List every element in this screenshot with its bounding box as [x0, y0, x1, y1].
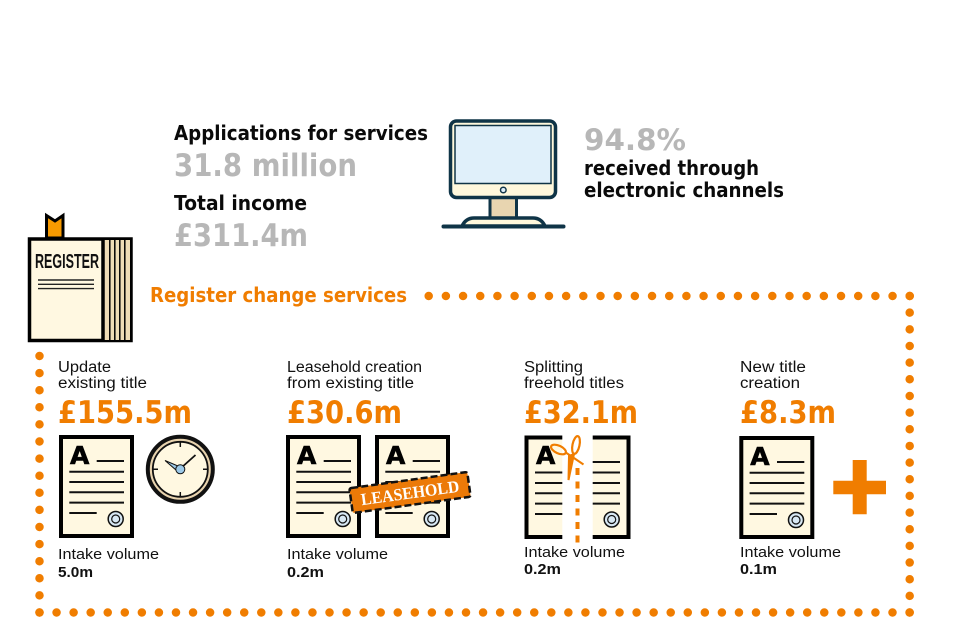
icon: document: [741, 438, 812, 537]
column: splitting freehold titles: 0.2m: [524, 561, 561, 578]
applications label: Applications for services: [174, 121, 428, 145]
intake: Intake volume: [740, 544, 841, 561]
label: Leasehold creation: [287, 359, 422, 376]
intake: Intake volume: [287, 546, 388, 563]
icon: register book: REGISTER: [35, 250, 99, 273]
income value: £311.4m: [174, 218, 308, 254]
electronic channels statistic: [584, 123, 784, 202]
column: leasehold creation: [287, 359, 471, 581]
value: £32.1m: [524, 395, 638, 431]
icon: document: [61, 437, 132, 536]
icon: scissors: [550, 435, 584, 545]
column: update existing title: [58, 359, 213, 581]
icon: document split: [526, 430, 628, 545]
column: update existing title: existing title: [58, 375, 147, 392]
column: new title creation: creation: [740, 375, 800, 392]
column: new title creation: [740, 359, 886, 578]
label: Update: [58, 359, 111, 376]
icon: clock: [148, 437, 213, 502]
icon: plus: [833, 460, 886, 514]
icon: document left: [288, 437, 359, 536]
column: leasehold creation: 0.2m: [287, 564, 324, 581]
intake: Intake volume: [58, 546, 159, 563]
label: Splitting: [524, 359, 583, 376]
icon: register book: [30, 216, 131, 341]
section heading: Register change services: [150, 283, 407, 307]
intake: Intake volume: [524, 544, 625, 561]
percentage caption: received through: [584, 156, 759, 180]
icon: document: A: [70, 441, 90, 470]
stamp: leasehold: LEASEHOLD: [360, 477, 460, 509]
column: splitting freehold titles: freehold titles: [524, 375, 624, 392]
label: New title: [740, 359, 806, 376]
value: £8.3m: [740, 395, 836, 431]
icon: document split: A: [536, 441, 556, 470]
icon: computer monitor: [444, 121, 564, 226]
dotted border: [40, 296, 910, 613]
column: leasehold creation: from existing title: [287, 375, 414, 392]
percentage: 94.8%: [584, 123, 686, 157]
value: £30.6m: [287, 395, 402, 431]
icon: document left: A: [297, 441, 317, 470]
icon: document right: A: [386, 441, 406, 470]
icon: document right: [377, 437, 448, 536]
electronic channels statistic: electronic channels: [584, 178, 784, 202]
income label: Total income: [174, 191, 307, 215]
value: £155.5m: [58, 395, 192, 431]
column: splitting freehold titles: [524, 359, 638, 578]
column: update existing title: 5.0m: [58, 564, 93, 581]
applications value: 31.8 million: [174, 148, 357, 184]
icon: document: A: [750, 442, 770, 471]
column: new title creation: 0.1m: [740, 561, 777, 578]
headline figures: [174, 121, 428, 254]
